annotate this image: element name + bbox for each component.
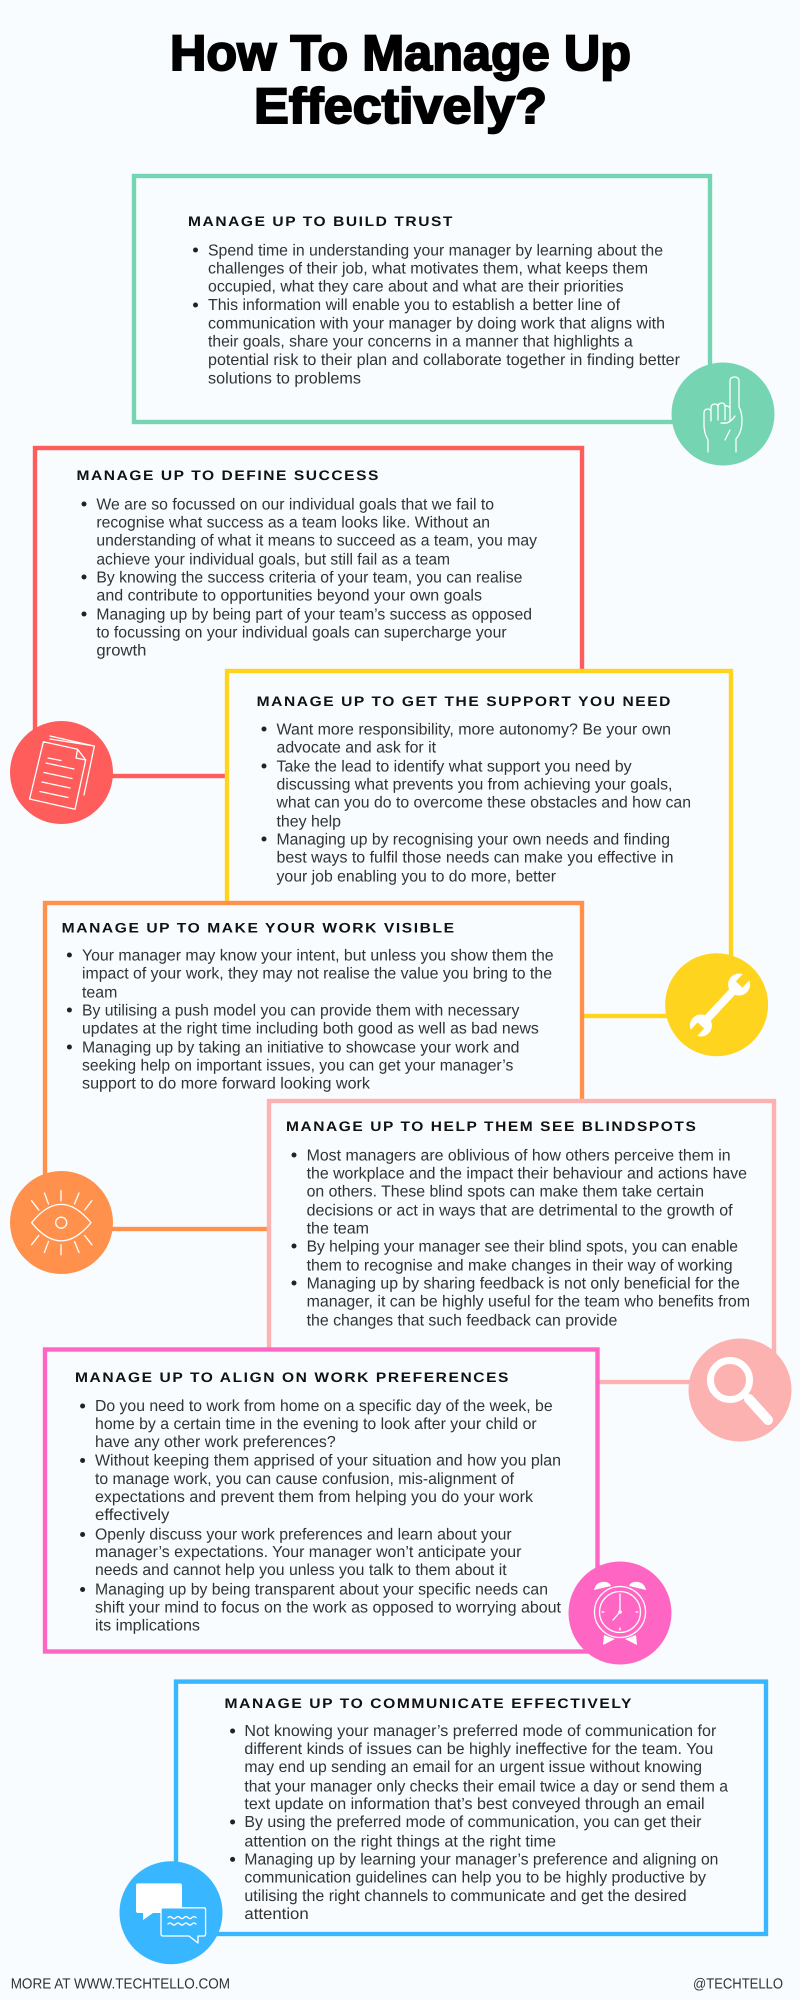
- bullet list: build trust: Spend time in understanding your manager by learning about the: [208, 242, 663, 259]
- bullet list: build trust: potential risk to their plan and collaborate together in finding better: [208, 352, 681, 369]
- frame and connector: blindspots: [269, 1101, 774, 1382]
- panel: help them see blindspots: [269, 1101, 792, 1442]
- icon: wrench: [665, 953, 768, 1056]
- bullet list: define success: We are so focussed on our individual goals that we fail to: [96, 496, 494, 513]
- bullet list: build trust: challenges of their job, what motivates them, what keeps them: [208, 260, 648, 277]
- bullet list: visible: updates at the right time including both good as well as bad news: [82, 1020, 539, 1037]
- heading: communicate: MANAGE UP TO COMMUNICATE EFFECTIVELY: [224, 1696, 633, 1711]
- bullet list: support: Want more responsibility, more autonomy? Be your own: [276, 721, 671, 738]
- bullet list: support: discussing what prevents you from achieving your goals,: [276, 776, 672, 793]
- bullet list: communicate: communication guidelines can help you to be highly productive by: [244, 1869, 706, 1886]
- bullet list: build trust: occupied, what they care about and what are their priorities: [208, 278, 624, 295]
- frame: build trust: [134, 176, 710, 422]
- panel: make your work visible: [10, 903, 582, 1274]
- bullet list: preferences: to manage work, you can cause confusion, mis-alignment of: [95, 1471, 515, 1488]
- icon: pointing finger: [672, 362, 774, 466]
- bullet list: visible: Your manager may know your intent, but unless you show them the: [82, 947, 554, 964]
- bullet list: communicate: attention: [244, 1906, 309, 1923]
- bullet list: communicate: text update on information that’s best conveyed through an email: [244, 1796, 705, 1813]
- bullet list: blindspots: Managing up by sharing feedback is not only beneficial for the: [307, 1275, 740, 1292]
- bullet list: blindspots: [292, 1147, 750, 1329]
- bullet list: support: Take the lead to identify what support you need by: [276, 758, 632, 775]
- frame: preferences: [45, 1350, 598, 1652]
- bullet list: preferences: Managing up by being transparent about your specific needs can: [95, 1582, 548, 1598]
- bullet list: blindspots: the workplace and the impact their behaviour and actions have: [307, 1165, 747, 1182]
- bullet list: communicate: attention on the right things at the right time: [244, 1834, 556, 1850]
- panel: align on work preferences: [45, 1350, 672, 1664]
- bullet list: support: advocate and ask for it: [276, 739, 437, 756]
- bullet list: preferences: effectively: [95, 1507, 169, 1524]
- bullet list: communicate: that your manager only checks their email twice a day or send them a: [244, 1778, 728, 1795]
- panel: communicate effectively: [120, 1682, 766, 1964]
- bullet list: define success: By knowing the success criteria of your team, you can realise: [96, 569, 522, 586]
- heading: define success: MANAGE UP TO DEFINE SUCCESS: [76, 468, 380, 483]
- bullet list: visible: team: [82, 984, 117, 1001]
- bullet list: define success: and contribute to opportunities beyond your own goals: [96, 587, 482, 604]
- heading: support: MANAGE UP TO GET THE SUPPORT YOU NEED: [257, 694, 672, 709]
- bullet list: communicate: Managing up by learning your manager’s preference and aligning on: [244, 1851, 718, 1868]
- bullet list: build trust: their goals, share your concerns in a manner that highlights a: [208, 333, 633, 350]
- bullet list: blindspots: By helping your manager see their blind spots, you can enable: [307, 1238, 738, 1255]
- bullet list: build trust: communication with your manager by doing work that aligns with: [208, 315, 665, 332]
- heading: preferences: MANAGE UP TO ALIGN ON WORK PREFERENCES: [75, 1370, 510, 1385]
- bullet list: preferences: shift your mind to focus on the work as opposed to worrying about: [95, 1600, 562, 1616]
- heading: visible: MANAGE UP TO MAKE YOUR WORK VISIBLE: [62, 920, 456, 935]
- bullet list: blindspots: on others. These blind spots can make them take certain: [307, 1183, 704, 1200]
- bullet list: preferences: expectations and prevent them from helping you do your work: [95, 1489, 534, 1506]
- bullet list: define success: Managing up by being part of your team’s success as opposed: [96, 606, 532, 623]
- bullet list: visible: support to do more forward looking work: [82, 1075, 371, 1092]
- bullet list: preferences: manager’s expectations. Your manager won’t anticipate your: [95, 1544, 522, 1561]
- bullet list: visible: Managing up by taking an initiative to showcase your work and: [82, 1039, 519, 1056]
- bullet list: support: Managing up by recognising your own needs and finding: [276, 831, 670, 848]
- bullet list: blindspots: them to recognise and make changes in their way of working: [307, 1257, 733, 1274]
- bullet list: define success: understanding of what it means to succeed as a team, you may: [96, 532, 537, 549]
- bullet list: preferences: Without keeping them apprised of your situation and how you plan: [95, 1452, 561, 1470]
- bullet list: preferences: have any other work preferences?: [95, 1434, 336, 1451]
- heading: build trust: MANAGE UP TO BUILD TRUST: [188, 214, 454, 229]
- bullet list: define success: achieve your individual goals, but still fail as a team: [96, 551, 450, 568]
- bullet list: blindspots: the changes that such feedback can provide: [307, 1312, 617, 1329]
- bullet list: support: what can you do to overcome these obstacles and how can: [276, 794, 691, 811]
- bullet list: define success: growth: [96, 643, 146, 660]
- bullet list: support: best ways to fulfil those needs can make you effective in: [276, 849, 674, 866]
- panel: build trust: [134, 176, 774, 466]
- bullet list: build trust: [193, 242, 681, 387]
- icon: alarm clock: [568, 1562, 672, 1664]
- bullet list: visible: [67, 947, 554, 1092]
- frame and connector: define success: [35, 448, 582, 776]
- bullet list: communicate: [230, 1723, 728, 1923]
- bullet list: support: your job enabling you to do more, better: [276, 868, 557, 885]
- icon: eye: [10, 1171, 113, 1274]
- bullet list: blindspots: Most managers are oblivious of how others perceive them in: [307, 1147, 731, 1164]
- bullet list: communicate: By using the preferred mode of communication, you can get their: [244, 1814, 702, 1831]
- bullet list: preferences: needs and cannot help you unless you talk to them about it: [95, 1562, 507, 1579]
- bullet list: support: [262, 721, 691, 885]
- title: How To Manage Up: [170, 25, 631, 81]
- bullet list: communicate: utilising the right channels to communicate and get the desired: [244, 1888, 687, 1905]
- icon: speech bubbles: [120, 1861, 222, 1964]
- title: [170, 25, 631, 134]
- heading: blindspots: MANAGE UP TO HELP THEM SEE BLINDSPOTS: [286, 1119, 697, 1134]
- panel: get the support you need: [227, 671, 768, 1056]
- bullet list: preferences: Openly discuss your work preferences and learn about your: [95, 1526, 512, 1544]
- footer: handle: @TECHTELLO: [693, 1976, 783, 1992]
- bullet list: visible: By utilising a push model you can provide them with necessary: [82, 1002, 519, 1019]
- bullet list: preferences: Do you need to work from home on a specific day of the week, be: [95, 1398, 553, 1415]
- frame: communicate: [176, 1682, 766, 1934]
- footer: website credit: MORE AT WWW.TECHTELLO.COM: [11, 1976, 230, 1992]
- panel: define success: [10, 448, 582, 824]
- bullet list: communicate: may end up sending an email for an urgent issue without knowing: [244, 1759, 702, 1776]
- icon: magnifying glass: [688, 1338, 792, 1442]
- frame and connector: support: [227, 671, 731, 1016]
- bullet list: preferences: [80, 1398, 562, 1634]
- frame and connector: visible: [45, 903, 582, 1229]
- bullet list: build trust: solutions to problems: [208, 370, 361, 387]
- bullet list: blindspots: the team: [307, 1220, 369, 1237]
- title: Effectively?: [254, 78, 547, 134]
- bullet list: preferences: its implications: [95, 1618, 200, 1634]
- bullet list: communicate: different kinds of issues can be highly ineffective for the team. You: [244, 1741, 713, 1758]
- bullet list: preferences: home by a certain time in the evening to look after your child or: [95, 1416, 537, 1433]
- bullet list: define success: recognise what success as a team looks like. Without an: [96, 514, 490, 531]
- bullet list: blindspots: decisions or act in ways that are detrimental to the growth of: [307, 1202, 733, 1219]
- bullet list: blindspots: manager, it can be highly useful for the team who benefits from: [307, 1293, 750, 1310]
- bullet list: define success: [82, 496, 537, 660]
- bullet list: build trust: This information will enable you to establish a better line of: [208, 297, 621, 314]
- bullet list: support: they help: [276, 813, 341, 830]
- bullet list: visible: seeking help on important issues, you can get your manager’s: [82, 1057, 513, 1074]
- bullet list: communicate: Not knowing your manager’s preferred mode of communication for: [244, 1723, 717, 1740]
- bullet list: visible: impact of your work, they may not realise the value you bring to the: [82, 965, 552, 982]
- icon: documents: [10, 721, 113, 824]
- bullet list: define success: to focussing on your individual goals can supercharge your: [96, 624, 507, 641]
